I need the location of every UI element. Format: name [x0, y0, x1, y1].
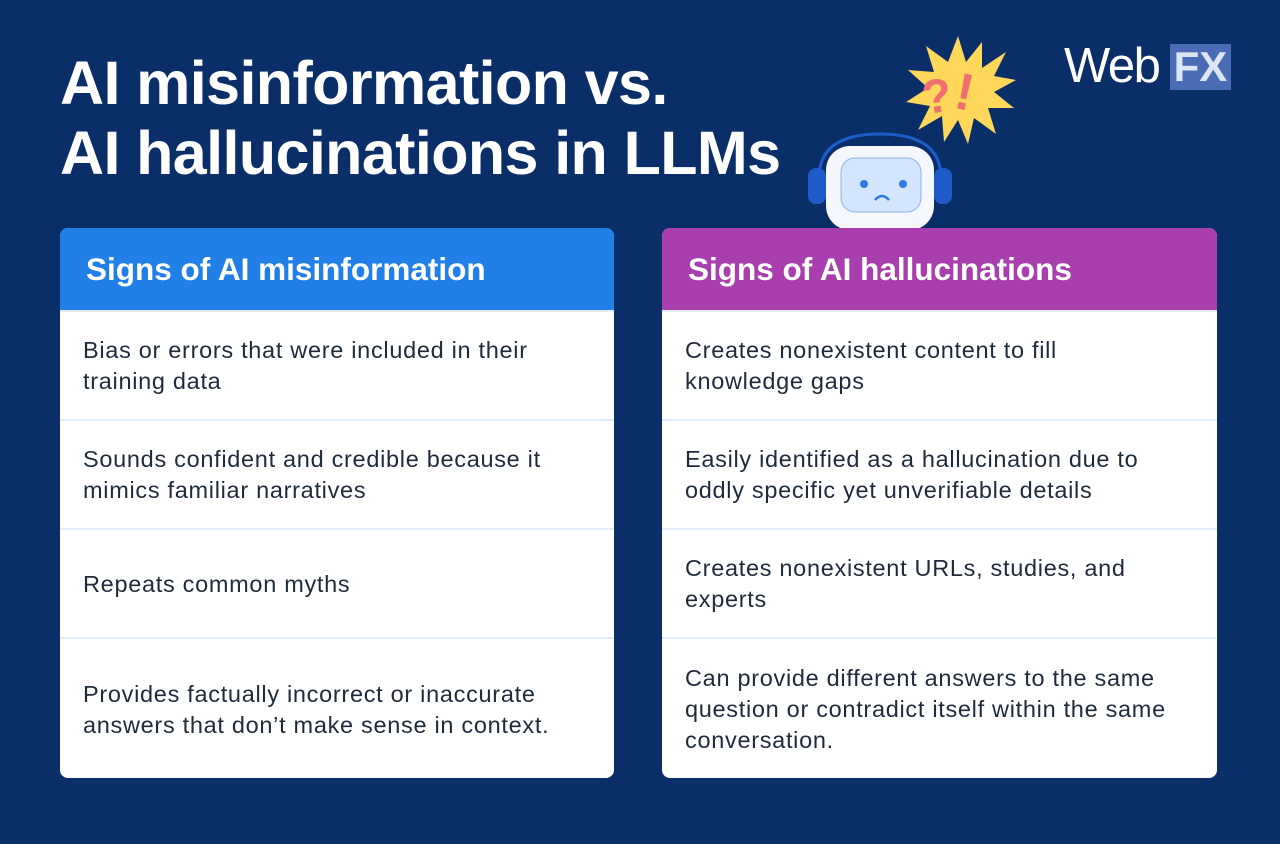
icon: starburst ?!: ?: [919, 69, 955, 125]
logo: WebFX: Web: [1064, 39, 1159, 93]
panel: hallucinations: Creates nonexistent URLs, studies, and: [685, 555, 1126, 581]
logo: WebFX: [1064, 39, 1231, 93]
panel: hallucinations: knowledge gaps: [685, 368, 865, 394]
panel: misinformation: Repeats common myths: [83, 570, 350, 596]
panel: misinformation: answers that don’t make sense in context.: [83, 712, 549, 738]
logo: WebFX: FX: [1174, 43, 1227, 90]
panel: misinformation: [60, 228, 614, 778]
panel: hallucinations: [662, 228, 1217, 778]
panel: misinformation: training data: [83, 368, 221, 394]
heading: misinformation: Signs of AI misinformation: [86, 251, 486, 287]
icon: sad robot: [808, 132, 952, 228]
icon: starburst ?!: [906, 36, 1016, 144]
panel: hallucinations: question or contradict itself within the same: [685, 696, 1166, 722]
icon: starburst ?!: !: [950, 63, 979, 123]
title: [60, 49, 780, 187]
panel: misinformation: Sounds confident and credible because it: [83, 446, 541, 472]
heading: hallucinations: [662, 228, 1217, 310]
panel: hallucinations: oddly specific yet unverifiable details: [685, 477, 1092, 503]
panel: hallucinations: Easily identified as a hallucination due to: [685, 446, 1138, 472]
heading: misinformation: [60, 228, 614, 310]
panel: hallucinations: conversation.: [685, 727, 834, 753]
panel: misinformation: mimics familiar narratives: [83, 477, 366, 503]
title: AI misinformation vs.: [60, 49, 668, 117]
title: AI hallucinations in LLMs: [60, 119, 780, 187]
panel: hallucinations: Can provide different answers to the same: [685, 665, 1155, 691]
panel: hallucinations: experts: [685, 586, 767, 612]
panel: misinformation: Provides factually incorrect or inaccurate: [83, 680, 536, 706]
heading: hallucinations: Signs of AI hallucinations: [688, 251, 1072, 287]
panel: hallucinations: Creates nonexistent content to fill: [685, 337, 1057, 363]
panel: misinformation: Bias or errors that were included in their: [83, 337, 528, 363]
